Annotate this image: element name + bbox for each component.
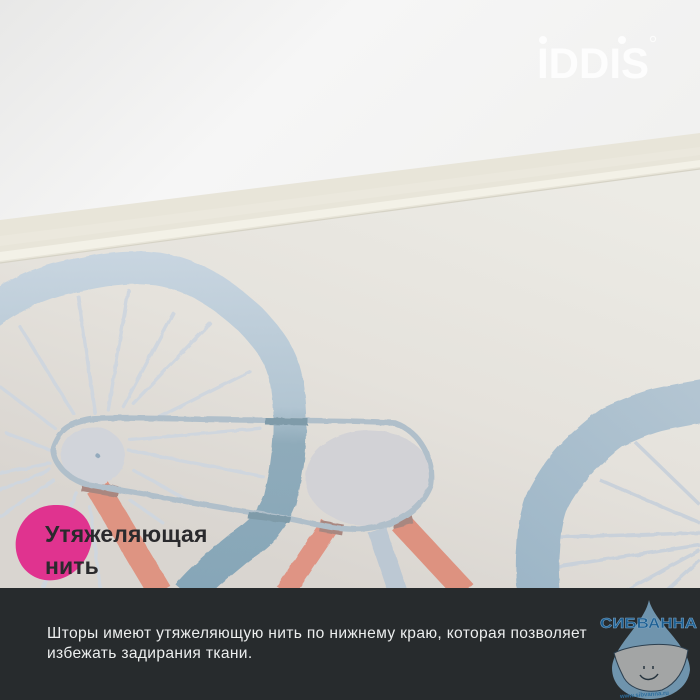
frame tube 2 [285, 525, 330, 592]
right spokes [555, 442, 700, 590]
hem body [0, 133, 700, 263]
bottom panel [0, 588, 700, 700]
brand name: СИБВАННА [600, 616, 698, 632]
frame tube 3 [400, 522, 465, 592]
fabric surface [0, 165, 700, 590]
heading: Утяжеляющая [45, 521, 207, 547]
watermark: Сибванна logo [600, 600, 698, 700]
heading [45, 521, 207, 579]
bath tub [614, 644, 688, 691]
chain and chainrings [53, 418, 433, 529]
description text [47, 625, 587, 662]
background wall [0, 0, 700, 270]
chain over rim [248, 421, 308, 520]
description text: Шторы имеют утяжеляющую нить по нижнему краю, которая позволяет [47, 625, 587, 642]
logo dot 2 [618, 36, 626, 44]
seat tube [377, 530, 398, 592]
hem stitched edge [0, 160, 700, 261]
hem highlight [0, 147, 700, 246]
frame tube 1 [98, 488, 160, 592]
curtain hem band [0, 133, 700, 263]
right bicycle wheel [537, 400, 700, 598]
front chainring [305, 430, 433, 526]
pink accent blob [16, 505, 92, 580]
bicycle frame tubes [82, 486, 465, 592]
tub face eyes and smile [640, 666, 658, 679]
registered mark [650, 36, 656, 42]
water drop [612, 600, 690, 699]
frame joins [82, 486, 412, 530]
left bicycle wheel [0, 268, 290, 595]
hem shadow line [0, 169, 700, 263]
website: www.sibvanna.ru [619, 691, 670, 700]
rear sprocket [61, 427, 125, 485]
description text: избежать задирания ткани. [47, 644, 253, 662]
hub dot [96, 454, 100, 458]
rim [0, 268, 290, 595]
spokes [0, 290, 263, 587]
heading: нить [45, 553, 99, 579]
logo dot 1 [539, 36, 547, 44]
right rim [537, 400, 700, 598]
logo: IDDIS [537, 36, 656, 80]
chain loop [53, 418, 432, 529]
